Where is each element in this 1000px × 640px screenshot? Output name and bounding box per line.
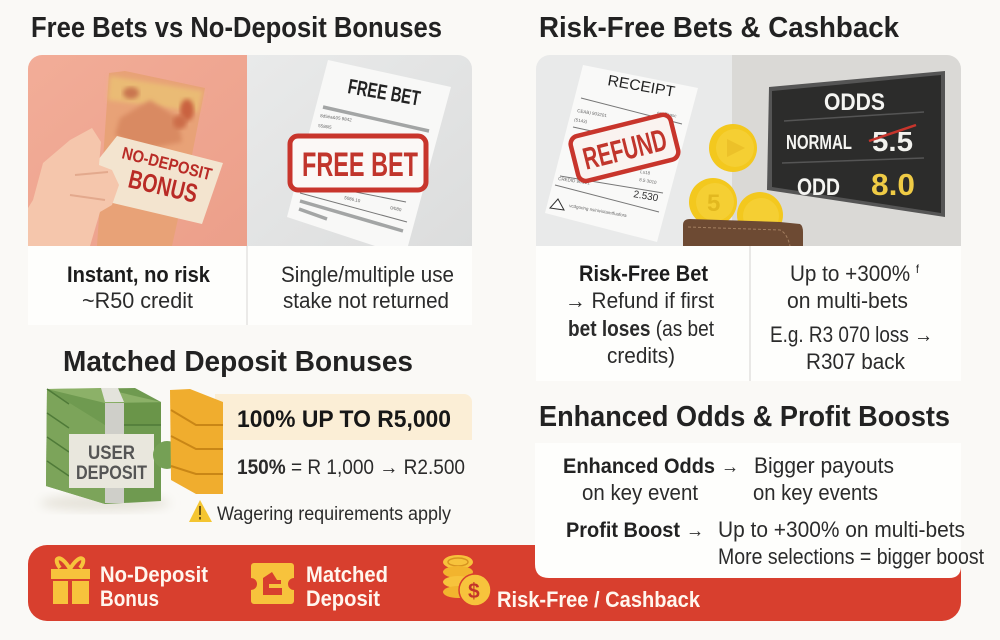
heading: enhanced odds and profit boosts: Enhanced Odds & Profit Boosts — [539, 401, 950, 433]
wallet — [683, 219, 803, 246]
enhanced odds row: → — [721, 456, 739, 478]
captions — [28, 246, 472, 325]
bonus tag — [98, 136, 223, 224]
heading: matched deposit bonuses: Matched Deposit Bonuses — [63, 346, 413, 378]
odds board: 8.0 — [871, 167, 915, 202]
enhanced odds row: Enhanced Odds — [563, 455, 715, 478]
panel: risk-free bets and cashback — [536, 55, 961, 381]
panel: matched deposit bonuses — [40, 388, 472, 525]
icon: gift — [51, 558, 90, 604]
bonus tag: BONUS — [126, 164, 201, 209]
bonus tag: NO-DEPOSIT — [120, 143, 214, 184]
legend: no-deposit bonus: Bonus — [100, 586, 159, 611]
legend: risk-free cashback: Risk-Free / Cashback — [497, 587, 701, 612]
odds board — [767, 71, 945, 217]
captions: credits) — [607, 343, 675, 368]
receipt: 8.5 3010 — [639, 177, 657, 185]
legend: no-deposit bonus: No-Deposit — [100, 562, 209, 587]
receipt: ev-dfaasc — [657, 110, 678, 119]
wagering note: Wagering requirements apply — [217, 504, 451, 525]
captions: Instant, no risk — [67, 262, 211, 287]
odds board: 5.5 — [872, 126, 913, 157]
captions: Single/multiple use — [281, 262, 454, 287]
receipt: 2.530 — [632, 189, 659, 204]
captions: stake not returned — [283, 288, 449, 313]
captions: E.g. R3 070 loss → — [770, 322, 933, 347]
profit boost row: Profit Boost — [566, 519, 680, 542]
legend: no-deposit bonus — [100, 562, 209, 611]
offer: 100 percent: 100% UP TO R5,000 — [237, 406, 451, 433]
user deposit label — [69, 434, 154, 488]
user deposit label: USER — [88, 443, 135, 464]
heading: free bets vs no-deposit bonuses: Free Bets vs No-Deposit Bonuses — [31, 12, 442, 44]
panel: free bets vs no-deposit — [28, 55, 472, 325]
captions — [536, 246, 961, 381]
icon: gold bonus stack — [170, 389, 223, 494]
offer: 150 percent: 150% = R 1,000 → R2.500 — [237, 456, 465, 479]
image: refund receipt, coins and odds board — [536, 55, 961, 246]
image: free bet slip: 5086.10 — [344, 195, 361, 203]
coins — [689, 124, 783, 222]
profit boost row: Up to +300% on multi-bets — [718, 517, 965, 542]
captions: → Refund if first — [565, 288, 714, 313]
icon: coins with dollar — [443, 555, 491, 606]
icon: warning — [189, 500, 212, 522]
panel: enhanced odds and profit boosts — [535, 443, 984, 578]
odds board: ODDS — [824, 89, 885, 116]
user deposit label: DEPOSIT — [76, 463, 147, 484]
enhanced odds row — [563, 453, 894, 505]
heading: risk-free bets and cashback: Risk-Free Bets & Cashback — [539, 12, 900, 44]
free bet stamp — [290, 136, 426, 190]
captions: Up to +300% — [790, 261, 918, 286]
icon: green cash stack — [40, 388, 181, 511]
hand — [28, 128, 119, 246]
icon: ticket — [251, 563, 294, 604]
image: free bet slip — [287, 60, 451, 246]
receipt: (5143) — [574, 117, 588, 124]
receipt — [545, 65, 698, 242]
profit boost row: → — [686, 520, 704, 542]
odds board: NORMAL — [786, 132, 852, 154]
captions: f — [916, 262, 920, 276]
image: free bet slip: 8d5éa&05 9842 — [320, 113, 353, 122]
captions: on multi-bets — [787, 288, 908, 313]
captions: Risk-Free Bet — [579, 261, 709, 286]
banknote — [97, 71, 205, 246]
captions: ~R50 credit — [82, 288, 193, 313]
legend: matched deposit: Matched — [306, 562, 388, 587]
legend: matched deposit — [306, 562, 388, 611]
image: free bet slip: 0/080 — [390, 205, 402, 212]
coins: 5 — [707, 190, 720, 217]
refund stamp — [569, 113, 680, 183]
receipt: CREDID 9C301 — [558, 176, 591, 185]
enhanced odds row: on key events — [753, 480, 878, 505]
refund stamp: REFUND — [579, 122, 670, 177]
receipt: RECEIPT — [606, 72, 676, 101]
image: free bet slip: FREE BET — [346, 75, 422, 111]
captions: bet loses (as bet — [568, 316, 714, 341]
profit boost row — [566, 517, 984, 569]
captions: R307 back — [806, 349, 906, 374]
image: hand holding no-deposit bonus — [28, 55, 472, 246]
odds board: ODD — [797, 174, 840, 201]
enhanced odds row: Bigger payouts — [754, 453, 894, 478]
enhanced odds row: on key event — [582, 480, 698, 505]
receipt: vcdgoring nsinivistamtfuafora — [569, 203, 628, 218]
offer highlight band — [215, 394, 472, 440]
legend bar — [28, 545, 961, 621]
image: free bet slip: 5586l5 — [318, 123, 332, 130]
free bet stamp: FREE BET — [302, 146, 418, 184]
receipt: Lu18 — [640, 169, 651, 176]
icon: coins with dollar: $ — [468, 580, 480, 603]
legend: matched deposit: Deposit — [306, 586, 381, 611]
receipt: CEAB) 903201 — [577, 108, 608, 118]
